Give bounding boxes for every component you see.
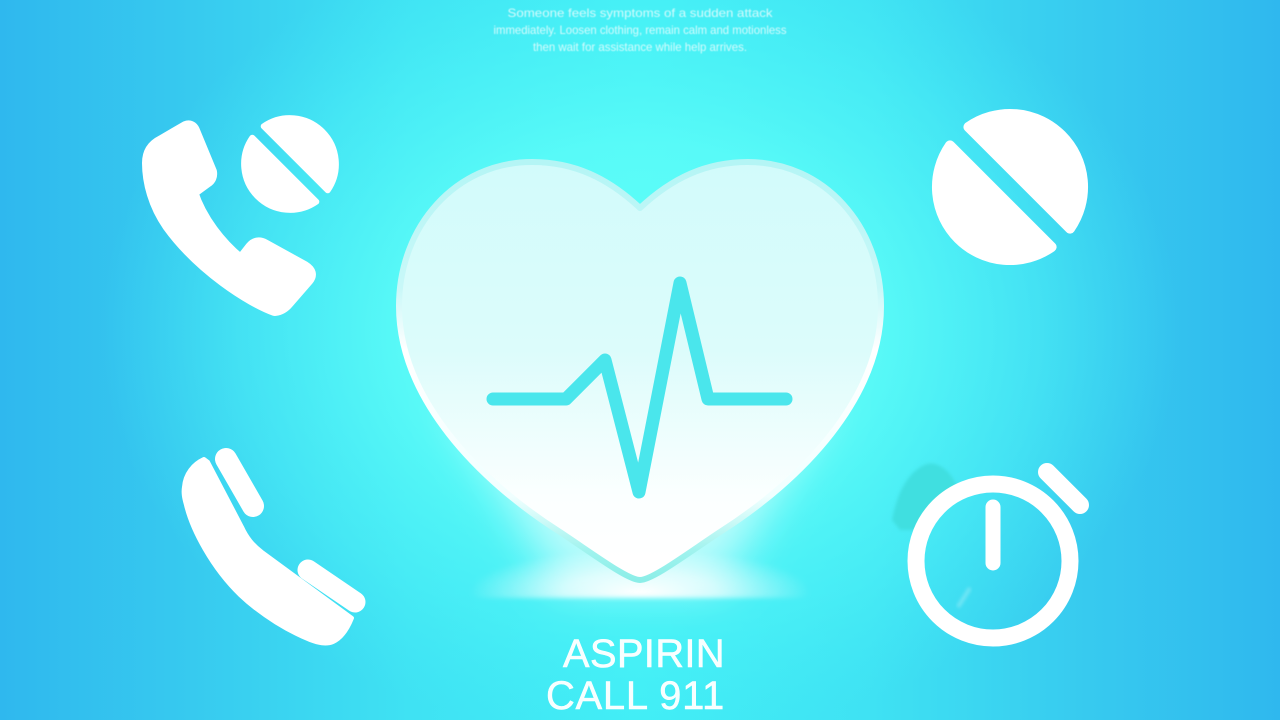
icon: ECG heartbeat line xyxy=(493,283,786,492)
icon: large pill xyxy=(937,114,1083,260)
handset xyxy=(149,127,309,309)
top button xyxy=(1047,472,1080,505)
caption: aspirin, call 911: CALL 911 xyxy=(546,674,725,718)
intro text block: immediately. Loosen clothing, remain calm and motionless xyxy=(494,23,786,37)
icon: phone and pill xyxy=(149,118,336,309)
glow behind heart xyxy=(450,400,830,585)
intro text block: then wait for assistance while help arrives. xyxy=(533,40,747,54)
caption: aspirin, call 911: ASPIRIN xyxy=(563,632,725,676)
faded side button xyxy=(892,463,958,530)
caption: aspirin, call 911 xyxy=(546,632,725,718)
small pill, upper half xyxy=(264,118,336,190)
intro text block: Someone feels symptoms of a sudden attack xyxy=(508,6,774,20)
small pill, lower half xyxy=(244,138,316,210)
intro text block xyxy=(494,6,786,54)
watch ring xyxy=(916,484,1070,638)
floor light beneath heart xyxy=(476,554,804,602)
mouthpiece bar xyxy=(308,570,355,602)
icon: stopwatch xyxy=(892,463,1080,638)
face reflection xyxy=(958,588,970,607)
watch hand xyxy=(986,507,1000,563)
earpiece bar xyxy=(226,459,253,506)
heart xyxy=(399,162,881,580)
handset body xyxy=(184,459,352,643)
icon: phone handset with bars xyxy=(184,459,355,643)
